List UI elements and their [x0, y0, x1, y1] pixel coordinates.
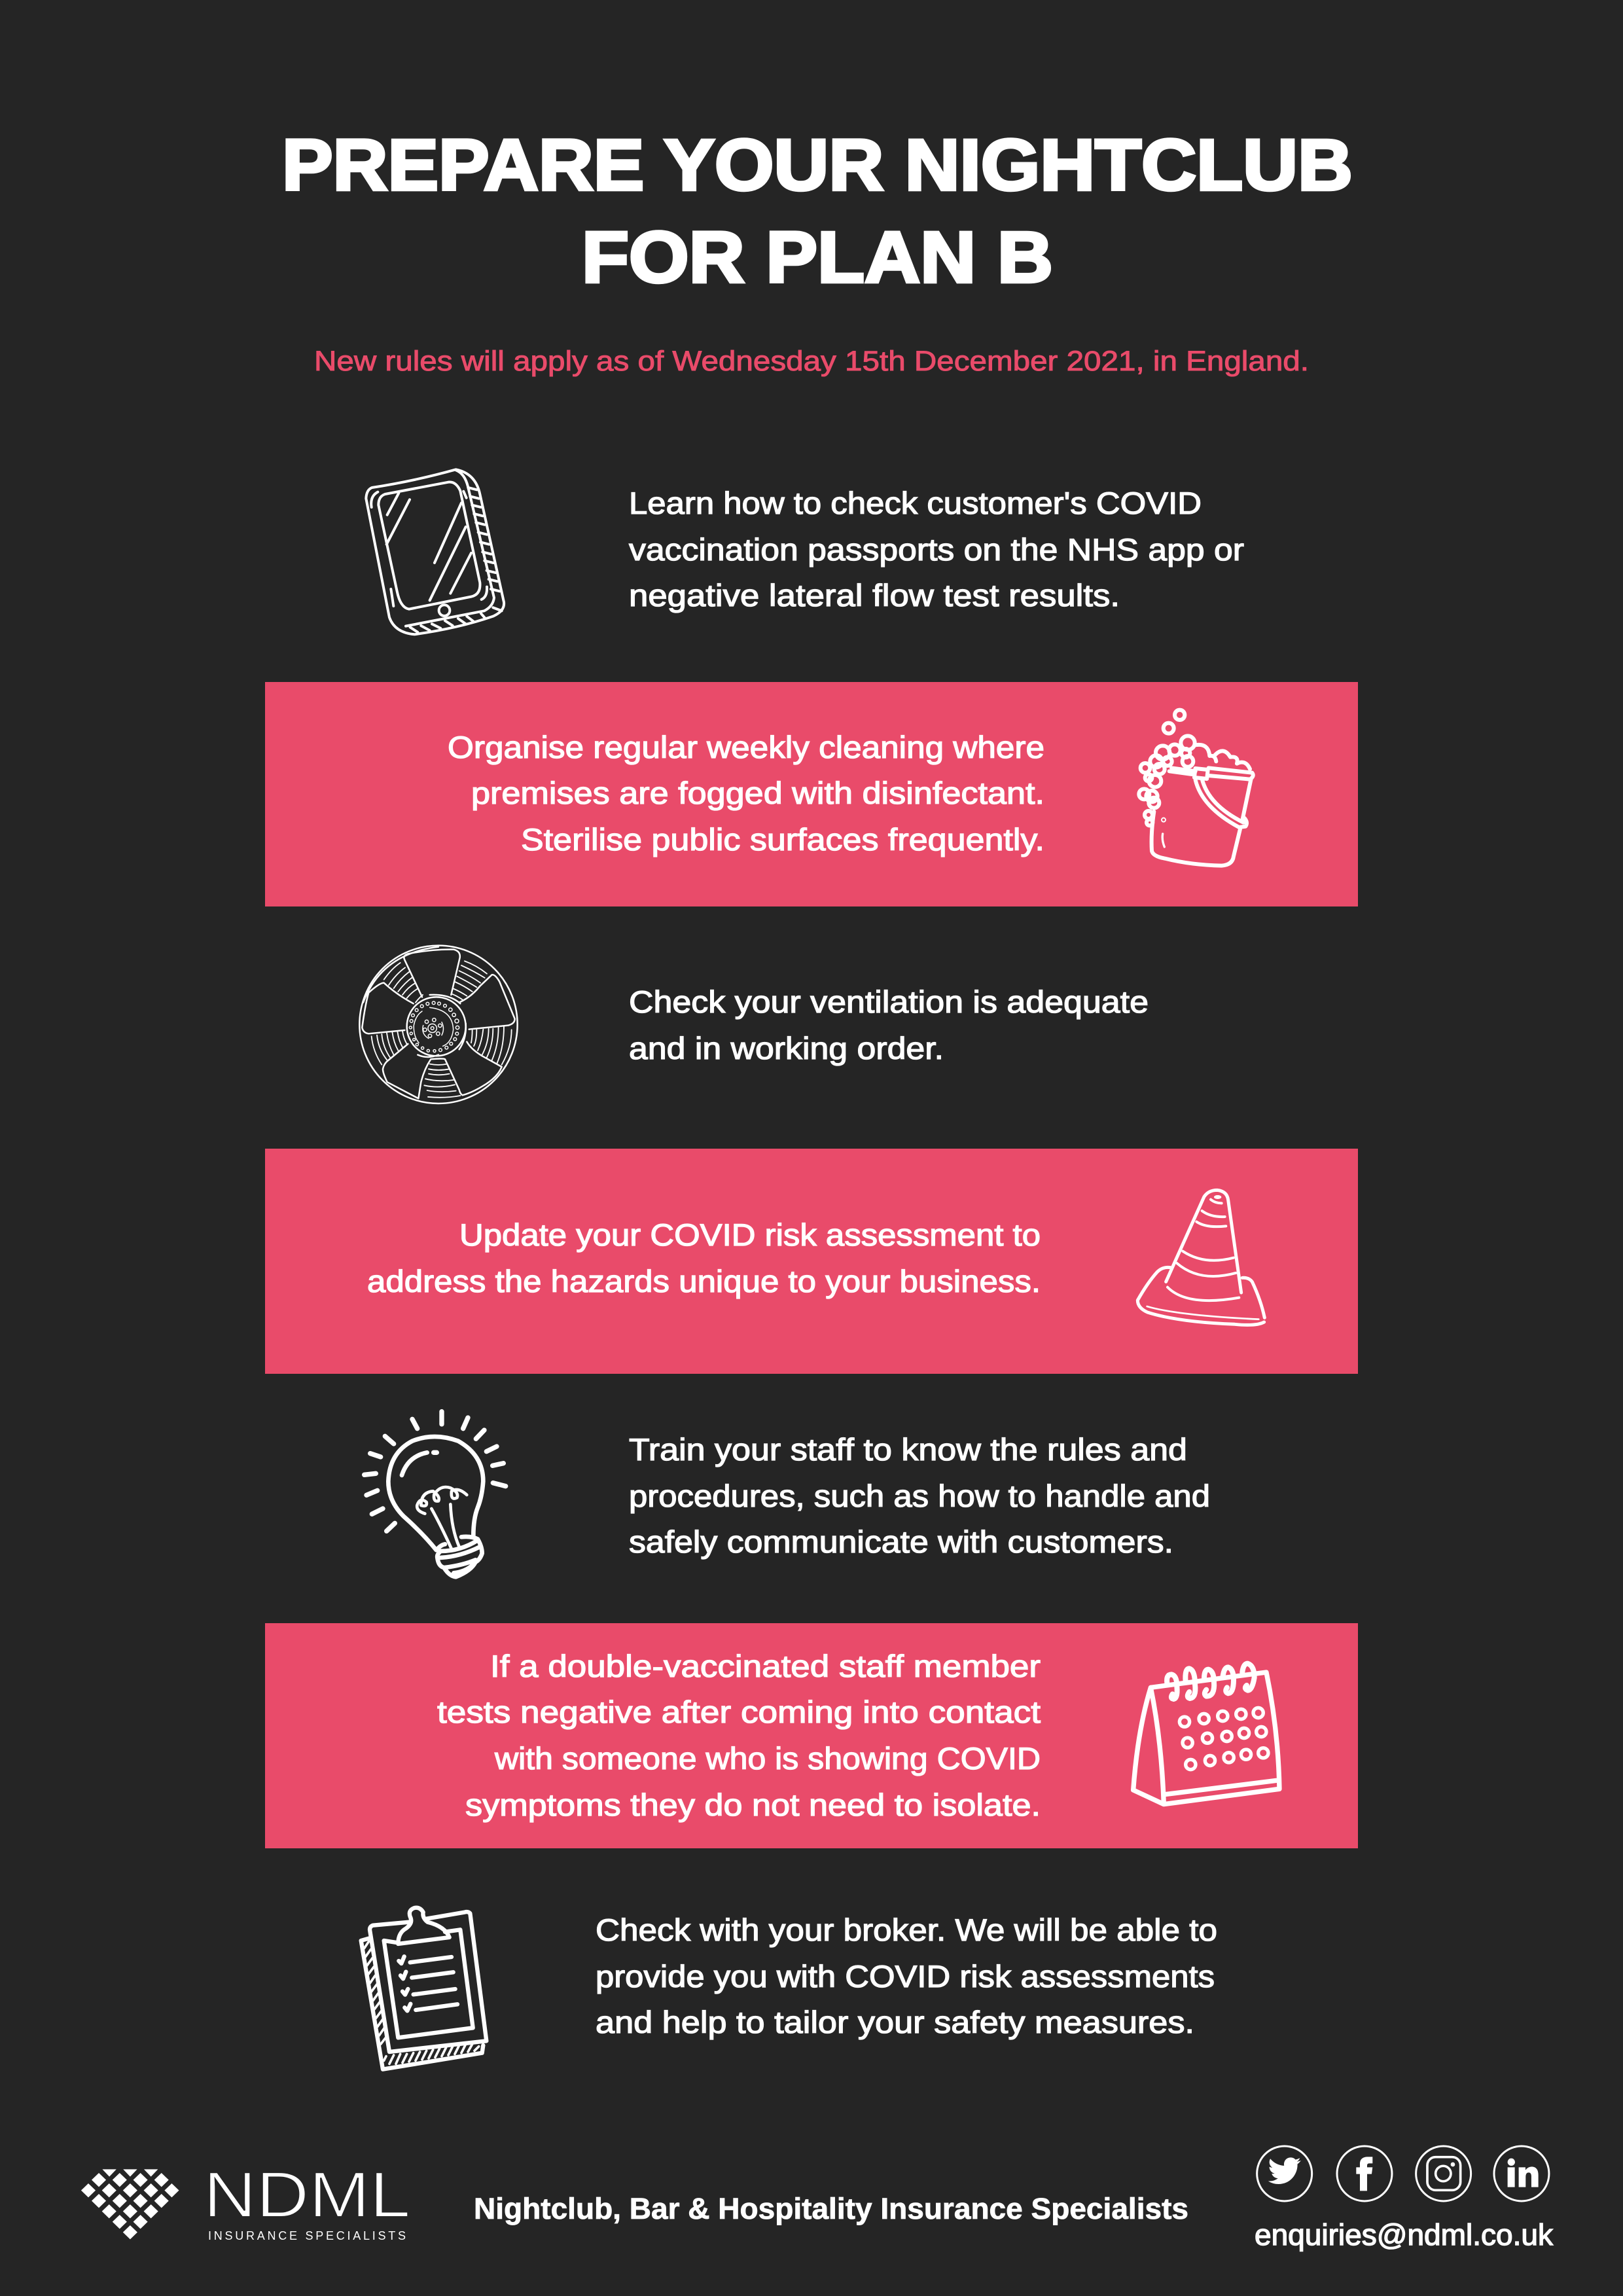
pink band: [265, 1623, 1358, 1848]
icon: twitter: [1257, 2146, 1312, 2201]
logo strapline: INSURANCE SPECIALISTS: [208, 2229, 406, 2242]
icon: desk calendar: [1133, 1664, 1279, 1804]
subtitle: New rules will apply as of Wednesday 15th December 2021, in England.: [314, 346, 1309, 377]
text: isolation rule: [437, 1649, 1041, 1822]
icon: linkedin: [1494, 2146, 1549, 2201]
text: check passports: Learn how to check customer's COVID: [629, 486, 1202, 520]
text: broker: [596, 1912, 1217, 2039]
social icons: [1257, 2146, 1549, 2201]
pink band: [265, 1149, 1358, 1374]
text: risk assessment: Update your COVID risk assessment to: [459, 1217, 1041, 1252]
text: isolation rule: If a double-vaccinated staff member: [490, 1649, 1041, 1683]
icon: ventilation fan: [359, 946, 518, 1103]
text: broker: and help to tailor your safety measures.: [596, 2005, 1194, 2039]
panel: check with broker: [361, 1908, 1217, 2070]
text: broker: Check with your broker. We will be able to: [596, 1912, 1217, 1947]
text: check passports: [629, 486, 1244, 613]
logo wordmark: NDML: [204, 2159, 410, 2231]
text: cleaning: premises are fogged with disinfectant.: [471, 776, 1044, 810]
title: PREPARE YOUR NIGHTCLUB: [282, 125, 1353, 206]
icon: instagram: [1416, 2146, 1471, 2201]
text: train staff: Train your staff to know the rules and: [629, 1432, 1187, 1467]
text: isolation rule: symptoms they do not need to isolate.: [465, 1787, 1041, 1822]
panel: ventilation: [359, 946, 1149, 1103]
logo: NDML: [81, 2159, 410, 2242]
title: [282, 125, 1353, 298]
text: cleaning: [448, 730, 1044, 857]
icon: light bulb: [365, 1412, 506, 1577]
pink band: [265, 682, 1358, 906]
text: risk assessment: address the hazards unique to your business.: [367, 1264, 1041, 1299]
panel: vaccination passports: [366, 469, 1244, 634]
text: check passports: negative lateral flow test results.: [629, 578, 1120, 613]
panel: staff isolation: [265, 1623, 1358, 1848]
logo mark: diamond: [81, 2169, 179, 2239]
text: train staff: [629, 1432, 1210, 1559]
icon: clipboard checklist: [361, 1908, 486, 2070]
text: isolation rule: with someone who is showing COVID: [494, 1741, 1041, 1776]
footer: [81, 2146, 1553, 2251]
text: ventilation: [629, 984, 1149, 1066]
panel: weekly cleaning: [265, 682, 1358, 906]
icon: bucket with foam: [1139, 710, 1253, 866]
text: ventilation: Check your ventilation is adequate: [629, 984, 1149, 1019]
icon: tablet phone: [366, 469, 504, 634]
text: broker: provide you with COVID risk assessments: [596, 1959, 1215, 1994]
email: enquiries@ndml.co.uk: [1255, 2218, 1553, 2251]
text: check passports: vaccination passports on the NHS app or: [629, 532, 1244, 567]
text: cleaning: Organise regular weekly cleaning where: [448, 730, 1044, 764]
panel: train staff: [365, 1412, 1210, 1577]
icon: traffic cone: [1137, 1190, 1264, 1325]
tagline: Nightclub, Bar & Hospitality Insurance Specialists: [474, 2192, 1188, 2225]
text: train staff: procedures, such as how to handle and: [629, 1479, 1210, 1513]
text: train staff: safely communicate with customers.: [629, 1524, 1173, 1559]
text: risk assessment: [367, 1217, 1041, 1299]
text: cleaning: Sterilise public surfaces frequently.: [521, 822, 1044, 857]
text: isolation rule: tests negative after coming into contact: [437, 1695, 1041, 1729]
icon: facebook: [1337, 2146, 1392, 2201]
panel: risk assessment: [265, 1149, 1358, 1374]
text: ventilation: and in working order.: [629, 1031, 944, 1066]
title: FOR PLAN B: [582, 217, 1053, 298]
